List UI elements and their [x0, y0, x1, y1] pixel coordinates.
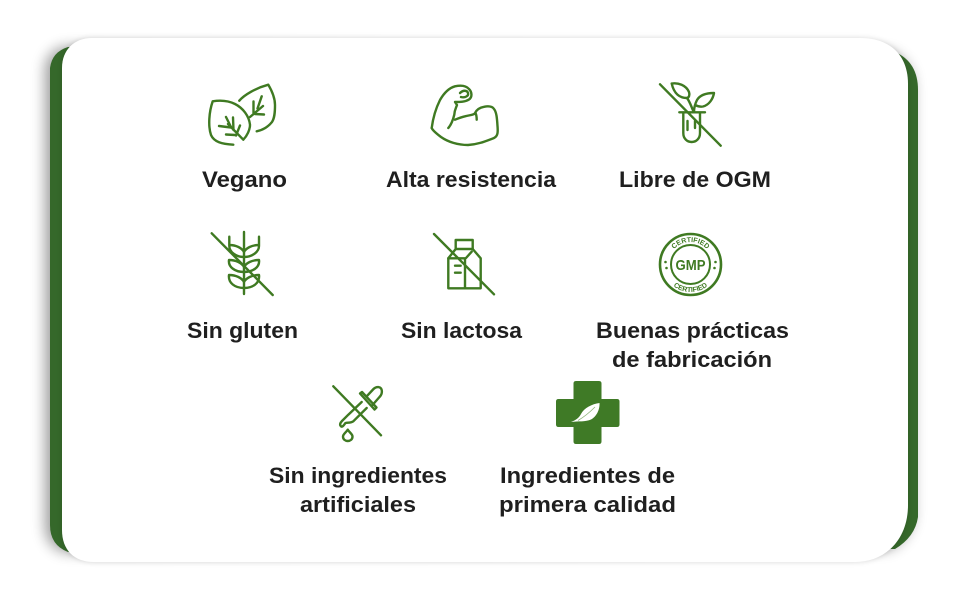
item: Sin lactosa — [401, 234, 523, 343]
item: Vegano — [202, 85, 287, 192]
item: Buenas practicas de fabricacion — [596, 232, 789, 372]
item: Sin gluten — [187, 232, 298, 343]
label: Libre de OGM: Libre de OGM — [619, 167, 771, 192]
icon: GMP certified stamp — [658, 232, 722, 296]
item: Sin ingredientes artificiales — [269, 386, 447, 517]
label: Sin gluten: Sin gluten — [187, 318, 298, 343]
item: Alta resistencia — [386, 86, 557, 192]
label: Buenas practicas de fabricacion — [596, 318, 789, 372]
label: Sin lactosa: Sin lactosa — [401, 318, 523, 343]
item: Libre de OGM — [619, 83, 771, 192]
icon: GMP certified stamp: GMP — [676, 257, 706, 274]
icon: crossed wheat — [212, 232, 273, 295]
label: Ingredientes de primera calidad: primera calidad — [499, 492, 676, 517]
label: Sin ingredientes artificiales: artificiales — [300, 492, 416, 517]
label: Ingredientes de primera calidad — [499, 463, 676, 517]
label: Sin ingredientes artificiales — [269, 463, 447, 517]
icon: GMP certified stamp: CERTIFIED — [674, 283, 707, 292]
icon: GMP certified stamp: CERTIFIED — [672, 237, 710, 248]
label: Alta resistencia: Alta resistencia — [386, 167, 557, 192]
icon: green cross with leaf — [556, 381, 620, 444]
label: Sin ingredientes artificiales: Sin ingredientes — [269, 463, 447, 488]
icon: crossed plant in test tube — [660, 83, 721, 146]
item: Ingredientes de primera calidad — [499, 381, 676, 517]
panel: white card — [62, 38, 908, 562]
card: green backing with shadow — [45, 47, 918, 552]
icon: leaves — [209, 85, 275, 145]
icon: crossed dropper — [333, 386, 382, 441]
label: Vegano: Vegano — [202, 167, 287, 192]
icon: crossed milk carton — [434, 234, 494, 294]
label: Buenas practicas de fabricacion: de fabricación — [612, 347, 772, 372]
label: Buenas practicas de fabricacion: Buenas prácticas — [596, 318, 789, 343]
icon: flexed arm — [432, 86, 498, 145]
label: Ingredientes de primera calidad: Ingredientes de — [500, 463, 675, 488]
